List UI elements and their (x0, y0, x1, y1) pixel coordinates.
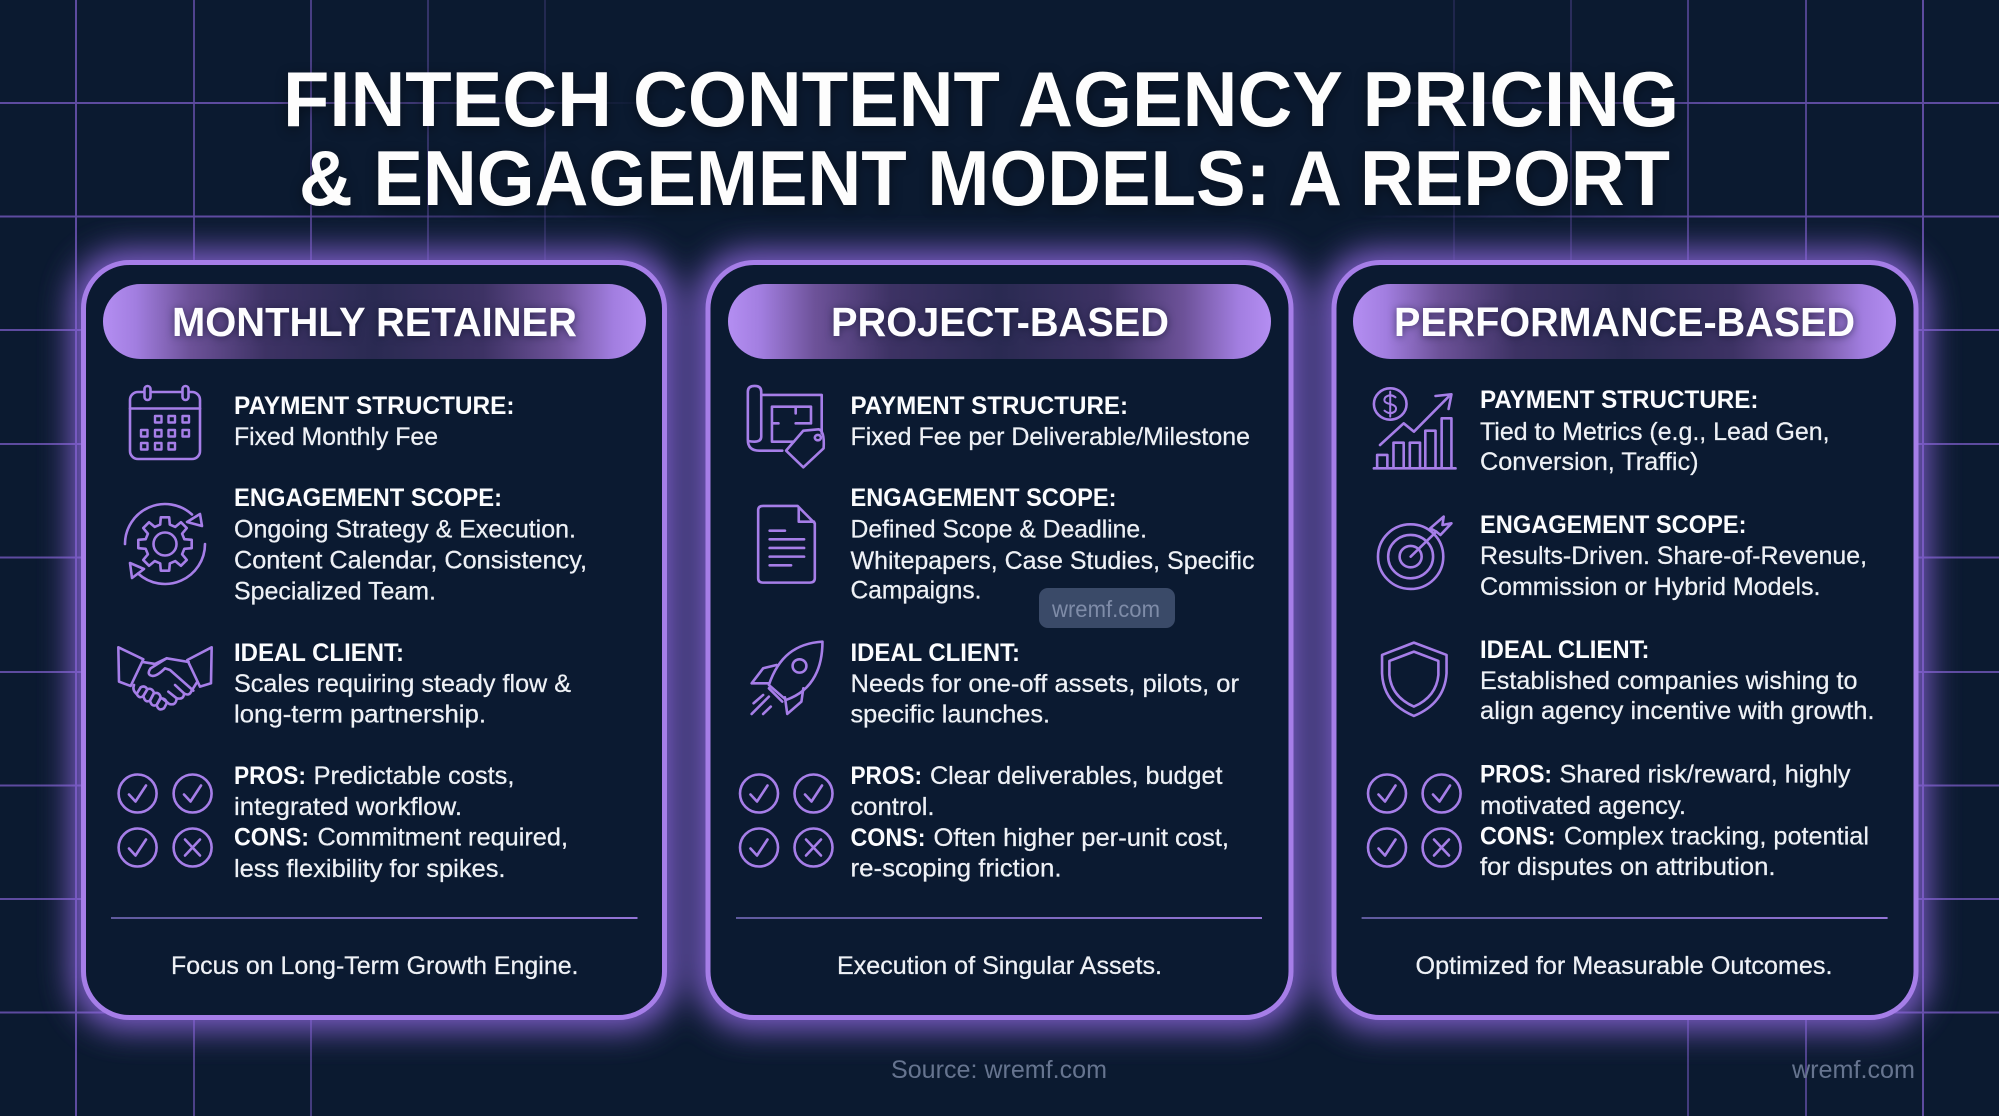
text: pros and cons (850, 762, 1229, 883)
text: pros and cons: CONS: (234, 824, 309, 852)
title (283, 55, 1679, 222)
heading pill: performance-based (1353, 284, 1896, 359)
text: payment structure (850, 392, 1250, 451)
text: pros and cons: Commitment required, (318, 824, 568, 852)
watermark badge: wremf.com (1051, 596, 1160, 622)
icon: calendar (130, 386, 200, 459)
text: ideal client (850, 639, 1239, 729)
text: engagement scope: Specialized Team. (234, 578, 436, 606)
text: engagement scope: Content Calendar, Consistency, (234, 546, 587, 574)
text: payment structure (1480, 386, 1830, 476)
icon: document (758, 506, 815, 583)
text: pros and cons: CONS: (1480, 823, 1556, 851)
text: ideal client: IDEAL CLIENT: (850, 639, 1020, 667)
panel: monthly retainer (84, 262, 664, 1018)
text: pros and cons (1480, 761, 1869, 881)
footer: project-based summary: Execution of Singular Assets. (837, 952, 1162, 980)
text: pros and cons: integrated workflow. (234, 793, 462, 821)
icons: check and cross marks (1368, 774, 1461, 866)
text: payment structure: Fixed Fee per Deliverable/Milestone (850, 423, 1250, 451)
text: ideal client: specific launches. (850, 701, 1050, 729)
icons: check and cross marks (740, 774, 832, 866)
text: engagement scope: Commission or Hybrid Models. (1480, 573, 1820, 601)
text: engagement scope (1480, 511, 1867, 601)
text: pros and cons: Clear deliverables, budget (930, 762, 1223, 790)
heading pill: monthly retainer (103, 284, 646, 359)
heading pill: project-based: PROJECT-BASED (831, 299, 1169, 345)
text: pros and cons: Often higher per-unit cost, (934, 824, 1229, 852)
text: pros and cons: PROS: (234, 762, 306, 790)
icon: blueprint with price tag (748, 386, 824, 467)
text: payment structure: Conversion, Traffic) (1480, 448, 1698, 476)
text: pros and cons: for disputes on attribution. (1480, 853, 1776, 881)
text: ideal client (1480, 636, 1874, 725)
footer: performance-based summary: Optimized for Measurable Outcomes. (1416, 952, 1832, 980)
icon: gear cycle (125, 504, 205, 584)
text: pros and cons: less flexibility for spikes. (234, 855, 506, 883)
text: ideal client: Established companies wishing to (1480, 667, 1858, 695)
text: engagement scope: Defined Scope & Deadline. (850, 516, 1147, 544)
text: ideal client: Needs for one-off assets, pilots, or (850, 670, 1239, 698)
text: engagement scope (234, 484, 587, 606)
icons: check and cross marks (119, 774, 212, 866)
icon: rocket (752, 642, 822, 714)
text: engagement scope: Results-Driven. Share-of-Revenue, (1480, 542, 1867, 570)
watermark badge (1039, 588, 1175, 628)
text: ideal client: Scales requiring steady flow & (234, 670, 571, 698)
text: payment structure: PAYMENT STRUCTURE: (1480, 386, 1758, 414)
text: ideal client (234, 639, 571, 728)
text: payment structure: PAYMENT STRUCTURE: (234, 392, 514, 420)
text: pros and cons: re-scoping friction. (850, 855, 1062, 883)
text: pros and cons: CONS: (850, 824, 926, 852)
text: payment structure: Tied to Metrics (e.g., Lead Gen, (1480, 418, 1830, 446)
text: engagement scope: Ongoing Strategy & Execution. (234, 516, 576, 544)
icon: target with arrow (1378, 517, 1451, 589)
heading pill: project-based (728, 284, 1271, 359)
text: pros and cons: PROS: (1480, 761, 1552, 789)
text: payment structure: Fixed Monthly Fee (234, 423, 438, 451)
text: pros and cons: Predictable costs, (314, 762, 514, 790)
text: pros and cons: Complex tracking, potential (1564, 823, 1869, 851)
text: ideal client: long-term partnership. (234, 700, 486, 728)
text: engagement scope (850, 484, 1254, 604)
watermark: bottom right: wremf.com (1791, 1056, 1915, 1084)
text: ideal client: IDEAL CLIENT: (1480, 636, 1650, 664)
text: payment structure (234, 392, 514, 451)
text: pros and cons: Shared risk/reward, highly (1560, 761, 1851, 789)
text: ideal client: align agency incentive with growth. (1480, 697, 1874, 725)
text: engagement scope: Campaigns. (850, 576, 982, 604)
text: ideal client: IDEAL CLIENT: (234, 639, 404, 667)
text: pros and cons: PROS: (850, 762, 922, 790)
text: payment structure: PAYMENT STRUCTURE: (850, 392, 1128, 420)
text: engagement scope: ENGAGEMENT SCOPE: (234, 484, 502, 512)
panel: project-based (708, 262, 1291, 1018)
text: engagement scope: ENGAGEMENT SCOPE: (850, 484, 1116, 512)
footer: monthly retainer summary: Focus on Long-Term Growth Engine. (171, 952, 578, 980)
source credit: Source: wremf.com (891, 1056, 1107, 1084)
heading pill: monthly retainer: MONTHLY RETAINER (172, 299, 577, 345)
text: engagement scope: ENGAGEMENT SCOPE: (1480, 511, 1746, 539)
title: & ENGAGEMENT MODELS: A REPORT (299, 134, 1670, 222)
heading pill: performance-based: PERFORMANCE-BASED (1394, 299, 1855, 345)
icon: handshake (118, 647, 212, 709)
text: pros and cons: motivated agency. (1480, 792, 1686, 820)
title: FINTECH CONTENT AGENCY PRICING (283, 55, 1679, 143)
text: engagement scope: Whitepapers, Case Studies, Specific (850, 547, 1254, 575)
text: pros and cons: control. (850, 793, 934, 821)
panel: performance-based (1334, 262, 1916, 1018)
icon: shield (1382, 643, 1447, 716)
text: pros and cons (234, 762, 568, 883)
icon: growth chart with dollar (1374, 388, 1456, 468)
